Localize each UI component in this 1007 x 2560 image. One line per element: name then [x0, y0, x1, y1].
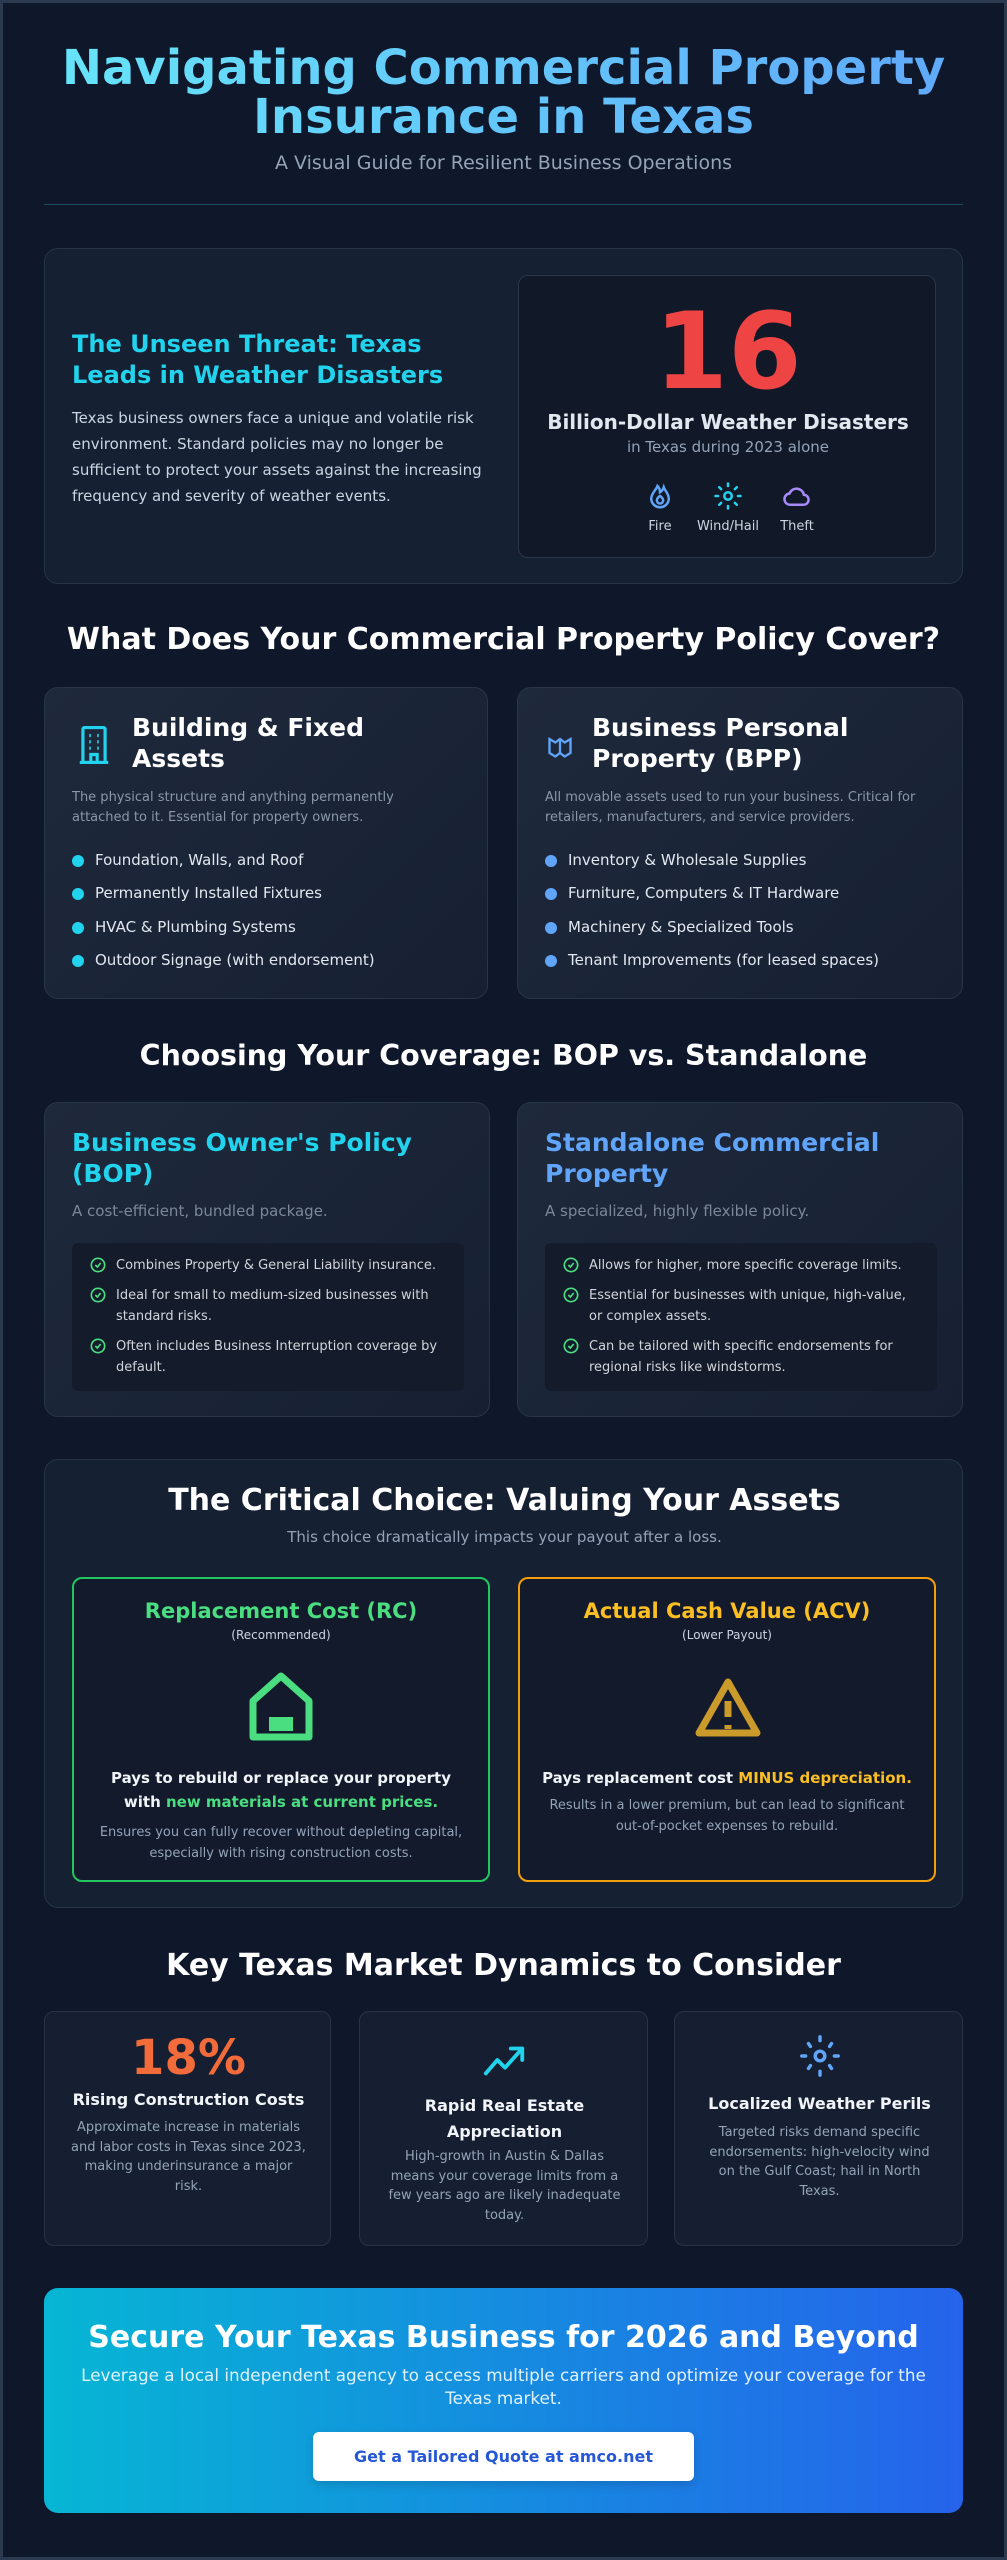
card: real estate appreciation: Rapid Real Estate	[425, 2096, 584, 2115]
card: construction costs: and labor costs in Texas since 2023,	[71, 2140, 306, 2154]
CTA banner: Leverage a local independent agency to access multiple carriers and optimize your coverage for the	[81, 2365, 926, 2385]
checklist: BOP: default.	[116, 1360, 166, 1375]
card: standalone	[517, 1102, 963, 1417]
box: replacement cost: especially with rising construction costs.	[149, 1846, 413, 1861]
title	[0, 44, 1007, 142]
CTA banner: Secure Your Texas Business for 2026 and Beyond	[88, 2320, 919, 2355]
bullets: Foundation, Walls, and Roof	[95, 851, 303, 869]
checklist: BOP: Often includes Business Interruption coverage by	[116, 1339, 437, 1354]
button	[313, 2432, 694, 2481]
heading: Assets	[132, 744, 225, 773]
CTA banner	[44, 2288, 963, 2513]
box: replacement cost: with new materials at current prices.	[124, 1793, 438, 1811]
panel: critical choice: The Critical Choice: Valuing Your Assets	[168, 1483, 841, 1518]
icon: wind/hail	[697, 482, 759, 534]
button: Get a Tailored Quote at amco.net	[354, 2447, 653, 2466]
card: BOP	[44, 1102, 490, 1417]
card: standalone: Property	[545, 1159, 668, 1188]
box: actual cash value: (Lower Payout)	[682, 1628, 772, 1642]
box: replacement cost: Replacement Cost (RC)	[145, 1599, 417, 1623]
card: real estate appreciation: means your coverage limits from a	[391, 2168, 618, 2184]
bullets: Outdoor Signage (with endorsement)	[95, 951, 375, 969]
card: standalone: A specialized, highly flexible policy.	[545, 1202, 809, 1220]
icon: trend up	[484, 2046, 524, 2076]
card: BOP: Business Owner's Policy	[72, 1128, 412, 1157]
text: threat description: frequency and severity of weather events.	[72, 487, 391, 505]
title: Navigating Commercial Property	[62, 40, 945, 96]
card: construction costs	[44, 2011, 331, 2246]
heading	[132, 713, 364, 773]
bullets: HVAC & Plumbing Systems	[95, 918, 296, 936]
icon: building	[80, 726, 108, 764]
text: threat description: sufficient to protect your assets against the increasing	[72, 461, 482, 479]
heading: unseen threat	[72, 330, 443, 389]
title: Insurance in Texas	[253, 89, 754, 145]
checklist: BOP	[72, 1243, 464, 1391]
card: building & fixed assets: attached to it. Essential for property owners.	[72, 810, 363, 825]
stat box: 16 disasters: in Texas during 2023 alone	[627, 438, 829, 456]
card: construction costs: risk.	[175, 2178, 202, 2194]
text: threat description: environment. Standard policies may no longer be	[72, 435, 444, 453]
card: real estate appreciation: few years ago are likely inadequate	[388, 2188, 621, 2203]
stat box: 16 disasters	[518, 275, 936, 558]
heading: market dynamics: Key Texas Market Dynamics to Consider	[166, 1948, 841, 1983]
box: actual cash value: Pays replacement cost MINUS depreciation.	[542, 1769, 912, 1787]
checklist: standalone: Can be tailored with specific endorsements for	[589, 1339, 893, 1354]
icon: fire: Fire	[648, 519, 672, 534]
checklist: BOP: Ideal for small to medium-sized businesses with	[116, 1288, 429, 1303]
heading: Business Personal	[592, 713, 848, 742]
heading: unseen threat: Leads in Weather Disasters	[72, 361, 443, 389]
panel: critical choice	[44, 1459, 963, 1908]
card: real estate appreciation: Appreciation	[447, 2122, 562, 2141]
box: replacement cost: (Recommended)	[231, 1628, 331, 1642]
CTA banner: Texas market.	[445, 2388, 562, 2408]
box: actual cash value	[518, 1577, 936, 1882]
heading: Property (BPP)	[592, 744, 803, 773]
bullets: Furniture, Computers & IT Hardware	[568, 884, 839, 902]
box: replacement cost: Ensures you can fully recover without depleting capital,	[100, 1825, 462, 1840]
icon: sun/weather	[800, 2035, 840, 2077]
card: weather perils: Localized Weather Perils	[708, 2094, 931, 2113]
heading: choosing coverage: Choosing Your Coverage: BOP vs. Standalone	[140, 1039, 867, 1072]
card: building & fixed assets: The physical structure and anything permanently	[72, 790, 394, 805]
card: weather perils: on the Gulf Coast; hail in North	[719, 2164, 920, 2179]
checklist: standalone: regional risks like windstorms.	[589, 1360, 786, 1375]
icon: house	[250, 1672, 312, 1740]
bullets: Inventory & Wholesale Supplies	[568, 851, 806, 869]
checklist: standalone	[545, 1243, 937, 1391]
card: real estate appreciation: today.	[485, 2208, 524, 2222]
box: actual cash value: Actual Cash Value (ACV)	[584, 1599, 870, 1623]
panel: unseen threat	[44, 248, 963, 584]
bullets	[545, 851, 879, 969]
stat label: Billion-Dollar Weather Disasters	[547, 410, 909, 434]
card: business personal property: All movable assets used to run your business. Critical for	[545, 790, 915, 805]
card: real estate appreciation	[359, 2011, 648, 2246]
box: replacement cost: Pays to rebuild or replace your property	[111, 1769, 451, 1787]
icon: wind/hail: Wind/Hail	[697, 519, 759, 534]
bullets: Permanently Installed Fixtures	[95, 884, 322, 902]
card: building & fixed assets	[44, 687, 488, 999]
icon: theft	[780, 487, 814, 534]
box: actual cash value: out-of-pocket expenses to rebuild.	[616, 1819, 838, 1834]
card: construction costs: Approximate increase in materials	[77, 2120, 300, 2135]
heading: Building & Fixed	[132, 713, 364, 742]
card: weather perils: Texas.	[799, 2184, 840, 2198]
checklist: BOP: Combines Property & General Liability insurance.	[116, 1258, 436, 1273]
big number: 16	[654, 290, 802, 413]
box: replacement cost	[72, 1577, 490, 1882]
checklist: standalone: Essential for businesses with unique, high-value,	[589, 1288, 906, 1303]
card: real estate appreciation: High-growth in Austin & Dallas	[405, 2149, 604, 2164]
subtitle: A Visual Guide for Resilient Business Operations	[275, 152, 732, 174]
card: weather perils	[674, 2011, 963, 2246]
panel: critical choice: This choice dramatically impacts your payout after a loss.	[287, 1528, 722, 1546]
checklist: standalone: or complex assets.	[589, 1309, 711, 1324]
icon: box	[548, 737, 572, 758]
bullets	[72, 851, 375, 969]
card: business personal property: retailers, manufacturers, and service providers.	[545, 810, 855, 825]
card: construction costs: 18%	[131, 2030, 246, 2086]
card: weather perils: Targeted risks demand specific	[719, 2125, 920, 2140]
card: BOP: (BOP)	[72, 1159, 153, 1188]
card: BOP: A cost-efficient, bundled package.	[72, 1202, 328, 1220]
card: standalone: Standalone Commercial	[545, 1128, 879, 1157]
heading: coverage: What Does Your Commercial Property Policy Cover?	[67, 622, 940, 657]
checklist: standalone: Allows for higher, more specific coverage limits.	[589, 1258, 902, 1273]
box: actual cash value: Results in a lower premium, but can lead to significant	[549, 1798, 905, 1813]
heading	[592, 713, 848, 773]
card: construction costs: making underinsurance a major	[85, 2159, 292, 2174]
checklist: BOP: standard risks.	[116, 1309, 212, 1324]
heading: unseen threat: The Unseen Threat: Texas	[72, 330, 422, 358]
bullets: Tenant Improvements (for leased spaces)	[568, 951, 879, 969]
icon: warning	[696, 1678, 760, 1736]
icon: theft: Theft	[780, 519, 814, 534]
card: weather perils: endorsements: high-velocity wind	[709, 2144, 930, 2160]
card: construction costs: Rising Construction Costs	[73, 2090, 304, 2109]
bullets: Machinery & Specialized Tools	[568, 918, 794, 936]
icon: fire	[648, 483, 672, 534]
card: business personal property	[517, 687, 963, 999]
text: threat description	[72, 409, 482, 505]
text: threat description: Texas business owners face a unique and volatile risk	[72, 409, 474, 427]
